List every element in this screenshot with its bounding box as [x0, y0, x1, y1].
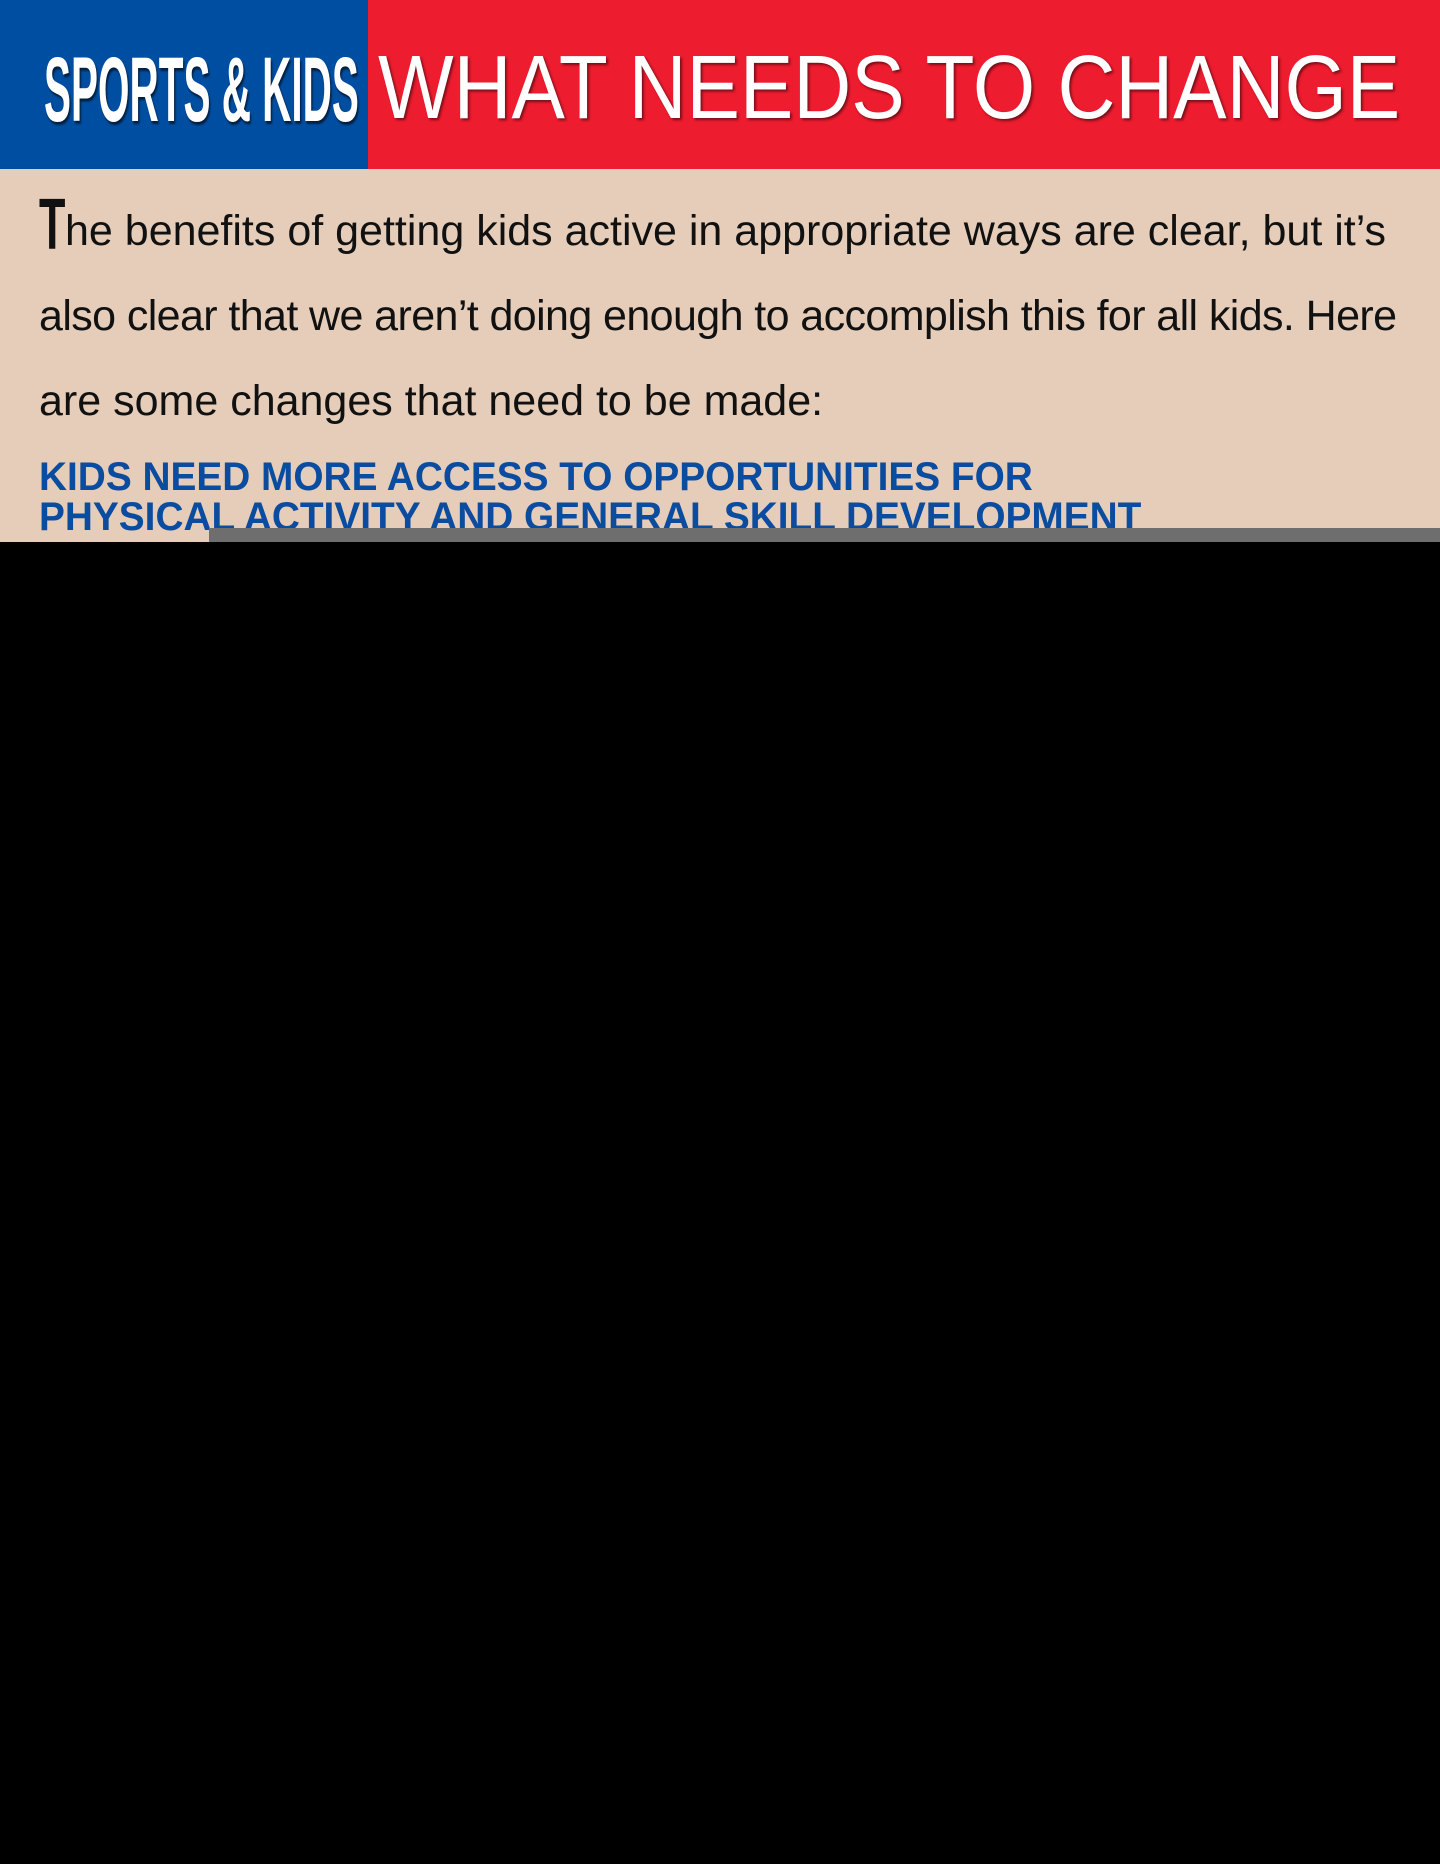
header: sports & kids blue block — [0, 0, 368, 169]
gray stripe — [209, 528, 1440, 542]
header: red title block — [368, 0, 1440, 169]
section heading: PHYSICAL ACTIVITY AND GENERAL SKILL DEVELOPMENT — [39, 495, 1141, 539]
intro paragraph: T — [39, 185, 65, 265]
main title: WHAT NEEDS TO CHANGE — [378, 38, 1400, 138]
intro paragraph: he benefits of getting kids active in appropriate ways are clear, but it’s — [65, 207, 1386, 255]
intro paragraph — [39, 185, 1396, 425]
intro paragraph: are some changes that need to be made: — [39, 377, 823, 425]
section heading — [39, 455, 1141, 539]
brand title: SPORTS & KIDS — [44, 39, 359, 141]
panel: intro beige — [0, 169, 1440, 542]
section heading: KIDS NEED MORE ACCESS TO OPPORTUNITIES FOR — [39, 455, 1033, 499]
intro paragraph: also clear that we aren’t doing enough to accomplish this for all kids. Here — [39, 292, 1396, 340]
